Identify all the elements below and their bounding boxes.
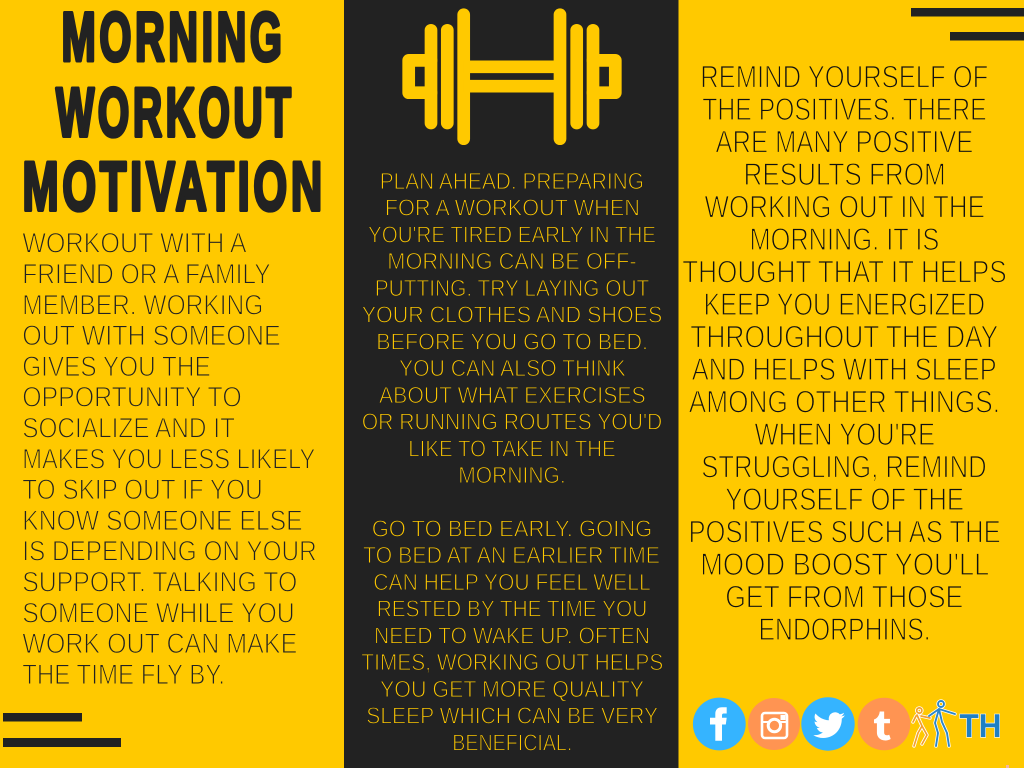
text block: plan ahead: FOR A WORKOUT WHEN <box>385 195 640 221</box>
text block: go to bed early: TIMES, WORKING OUT HELPS <box>361 649 663 675</box>
text block: go to bed early <box>361 515 663 755</box>
text block: plan ahead: YOU'RE TIRED EARLY IN THE <box>368 222 656 248</box>
icon: tumblr <box>858 698 910 750</box>
text block: go to bed early: TO BED AT AN EARLIER TIME <box>363 542 660 568</box>
logo: TH dancers <box>913 701 1002 746</box>
icon: facebook <box>693 698 746 750</box>
text block: remind yourself of the positives <box>682 59 1007 647</box>
icon: twitter <box>801 697 855 751</box>
panel: left column <box>0 0 344 768</box>
text block: workout with a friend: GIVES YOU THE <box>22 351 211 383</box>
accent bars: top right <box>911 8 1024 40</box>
text block: remind yourself of the positives: WHEN YOU'RE <box>754 416 935 452</box>
title <box>22 0 326 225</box>
text block: remind yourself of the positives: GET FROM THOSE <box>725 579 963 615</box>
text block: workout with a friend: MEMBER. WORKING <box>22 289 263 321</box>
text block: plan ahead: BEFORE YOU GO TO BED. <box>376 328 648 354</box>
text block: remind yourself of the positives: YOURSELF OF THE <box>725 481 964 517</box>
text block: plan ahead: YOUR CLOTHES AND SHOES <box>362 302 662 328</box>
text block: workout with a friend: KNOW SOMEONE ELSE <box>22 505 303 537</box>
text block: workout with a friend: THE TIME FLY BY. <box>22 659 225 691</box>
text block: go to bed early: GO TO BED EARLY. GOING <box>372 515 652 541</box>
text block: plan ahead: MORNING CAN BE OFF- <box>387 248 637 274</box>
text block: remind yourself of the positives: RESULTS FROM <box>744 156 946 192</box>
accent bars: bottom left <box>3 713 121 747</box>
icon: dancing figures <box>913 701 955 746</box>
title: MOTIVATION <box>22 148 326 225</box>
text block: go to bed early: NEED TO WAKE UP. OFTEN <box>374 622 650 648</box>
text block: workout with a friend: OUT WITH SOMEONE <box>22 320 281 352</box>
text block: plan ahead: PLAN AHEAD. PREPARING <box>380 168 644 194</box>
text block: go to bed early: SLEEP WHICH CAN BE VERY <box>366 702 658 728</box>
panel: middle column <box>344 0 678 768</box>
icon: instagram <box>748 698 800 750</box>
text block: workout with a friend: SOCIALIZE AND IT <box>22 412 235 444</box>
panel: right column <box>678 0 1024 768</box>
text block: go to bed early: YOU GET MORE QUALITY <box>380 676 644 702</box>
text block: workout with a friend: WORK OUT CAN MAKE <box>22 628 297 660</box>
text block: remind yourself of the positives: MORNING. IT IS <box>750 221 939 257</box>
text block: plan ahead: PUTTING. TRY LAYING OUT <box>375 275 649 301</box>
text block: go to bed early: RESTED BY THE TIME YOU <box>377 596 647 622</box>
text block: workout with a friend: OPPORTUNITY TO <box>22 382 242 414</box>
text block: remind yourself of the positives: ARE MANY POSITIVE <box>716 124 973 160</box>
text block: plan ahead: LIKE TO TAKE IN THE <box>408 435 616 461</box>
text block: plan ahead <box>362 168 662 488</box>
text block: workout with a friend: IS DEPENDING ON YOUR <box>22 536 317 568</box>
text block: workout with a friend: SUPPORT. TALKING TO <box>22 566 297 598</box>
text block: plan ahead: MORNING. <box>458 462 566 488</box>
text block: plan ahead: OR RUNNING ROUTES YOU'D <box>362 409 662 435</box>
text block: go to bed early: CAN HELP YOU FEEL WELL <box>373 569 651 595</box>
text block: remind yourself of the positives: ENDORPHINS. <box>758 611 931 647</box>
text block: workout with a friend: FRIEND OR A FAMILY <box>22 258 271 290</box>
text block: workout with a friend: MAKES YOU LESS LIKELY <box>22 443 315 475</box>
text block: go to bed early: BENEFICIAL. <box>452 729 572 755</box>
logo text: TH <box>960 707 1002 744</box>
text block: workout with a friend: SOMEONE WHILE YOU <box>22 597 295 629</box>
title: WORKOUT <box>56 74 294 151</box>
text block: plan ahead: ABOUT WHAT EXERCISES <box>379 382 646 408</box>
title: MORNING <box>62 0 286 76</box>
text block: plan ahead: YOU CAN ALSO THINK <box>399 355 626 381</box>
text block: workout with a friend: TO SKIP OUT IF YOU <box>22 474 263 506</box>
text block: workout with a friend: WORKOUT WITH A <box>22 228 247 260</box>
icon: dumbbell <box>409 15 615 139</box>
text block: workout with a friend <box>22 228 317 691</box>
